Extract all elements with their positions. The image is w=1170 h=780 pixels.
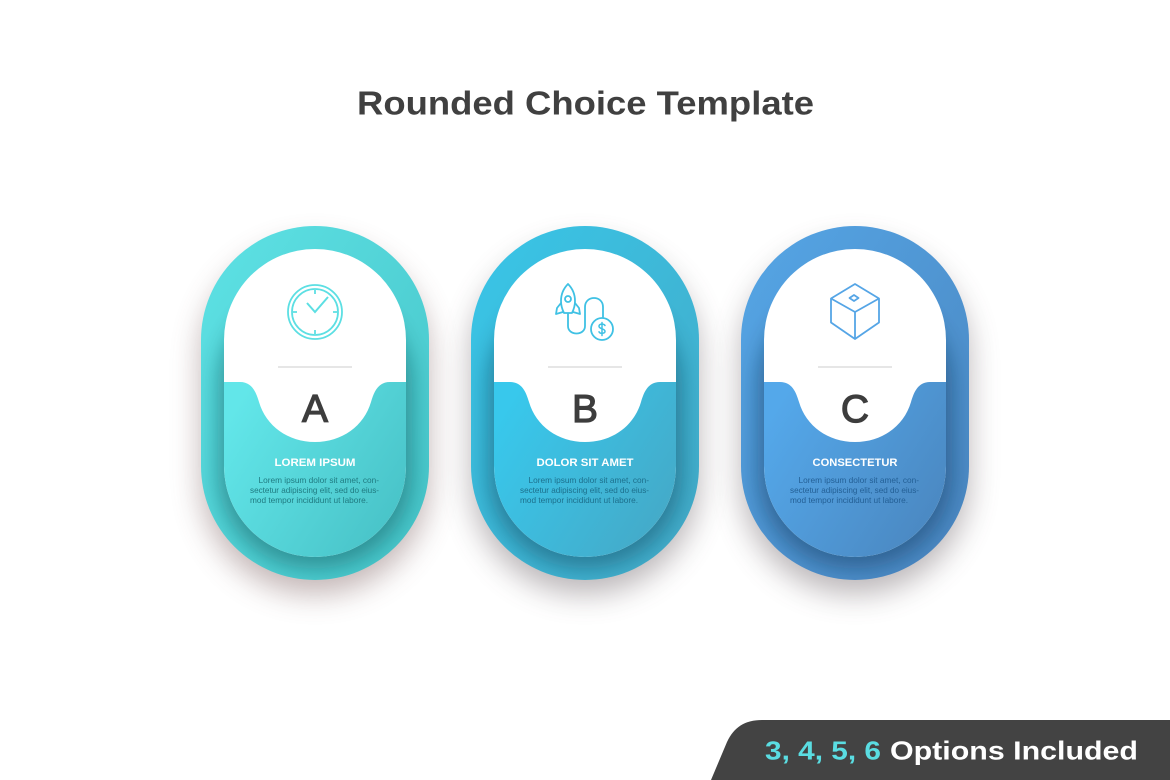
body text C xyxy=(790,476,919,505)
panel: option C xyxy=(741,226,969,594)
divider A xyxy=(278,366,352,368)
card A coloured lower panel xyxy=(224,382,406,557)
heading C: CONSECTETUR xyxy=(812,457,898,469)
body text A: mod tempor incididunt ut labore. xyxy=(250,496,368,505)
body text A xyxy=(250,476,379,505)
card A drop shadow xyxy=(201,244,429,594)
footer banner xyxy=(711,720,1170,780)
banner options text: Options Included xyxy=(890,736,1138,766)
icon: clock xyxy=(288,285,342,339)
heading A: LOREM IPSUM xyxy=(274,457,356,469)
icon: rocket and dollar coin xyxy=(556,284,613,340)
card A inner shadow xyxy=(218,290,412,568)
card C drop shadow xyxy=(741,244,969,594)
body text C: Lorem ipsum dolor sit amet, con- xyxy=(798,476,919,485)
banner numbers text: 3, 4, 5, 6 xyxy=(765,736,881,766)
card C coloured lower panel xyxy=(764,382,946,557)
banner background xyxy=(711,720,1170,780)
body text C: sectetur adipiscing elit, sed do eius- xyxy=(790,486,919,495)
body text B: sectetur adipiscing elit, sed do eius- xyxy=(520,486,649,495)
body text A: sectetur adipiscing elit, sed do eius- xyxy=(250,486,379,495)
heading B: DOLOR SIT AMET xyxy=(536,457,634,469)
card B outer pill xyxy=(471,226,699,580)
card C white inner pill xyxy=(764,249,946,557)
panel: option B xyxy=(471,226,699,594)
body text B: mod tempor incididunt ut labore. xyxy=(520,496,638,505)
card A outer pill xyxy=(201,226,429,580)
letter B: B xyxy=(572,388,598,431)
card C outer pill xyxy=(741,226,969,580)
body text B: Lorem ipsum dolor sit amet, con- xyxy=(528,476,649,485)
card A white inner pill xyxy=(224,249,406,557)
card B white inner pill xyxy=(494,249,676,557)
card B inner shadow xyxy=(488,290,682,568)
body text A: Lorem ipsum dolor sit amet, con- xyxy=(258,476,379,485)
card C inner shadow xyxy=(758,290,952,568)
icon: box xyxy=(831,284,879,339)
body text C: mod tempor incididunt ut labore. xyxy=(790,496,908,505)
body text B xyxy=(520,476,649,505)
card B drop shadow xyxy=(471,244,699,594)
divider B xyxy=(548,366,622,368)
title: Rounded Choice Template xyxy=(357,86,814,122)
letter C: C xyxy=(841,388,869,431)
letter A: A xyxy=(302,388,328,431)
panel: option A xyxy=(201,226,429,594)
divider C xyxy=(818,366,892,368)
card B coloured lower panel xyxy=(494,382,676,557)
